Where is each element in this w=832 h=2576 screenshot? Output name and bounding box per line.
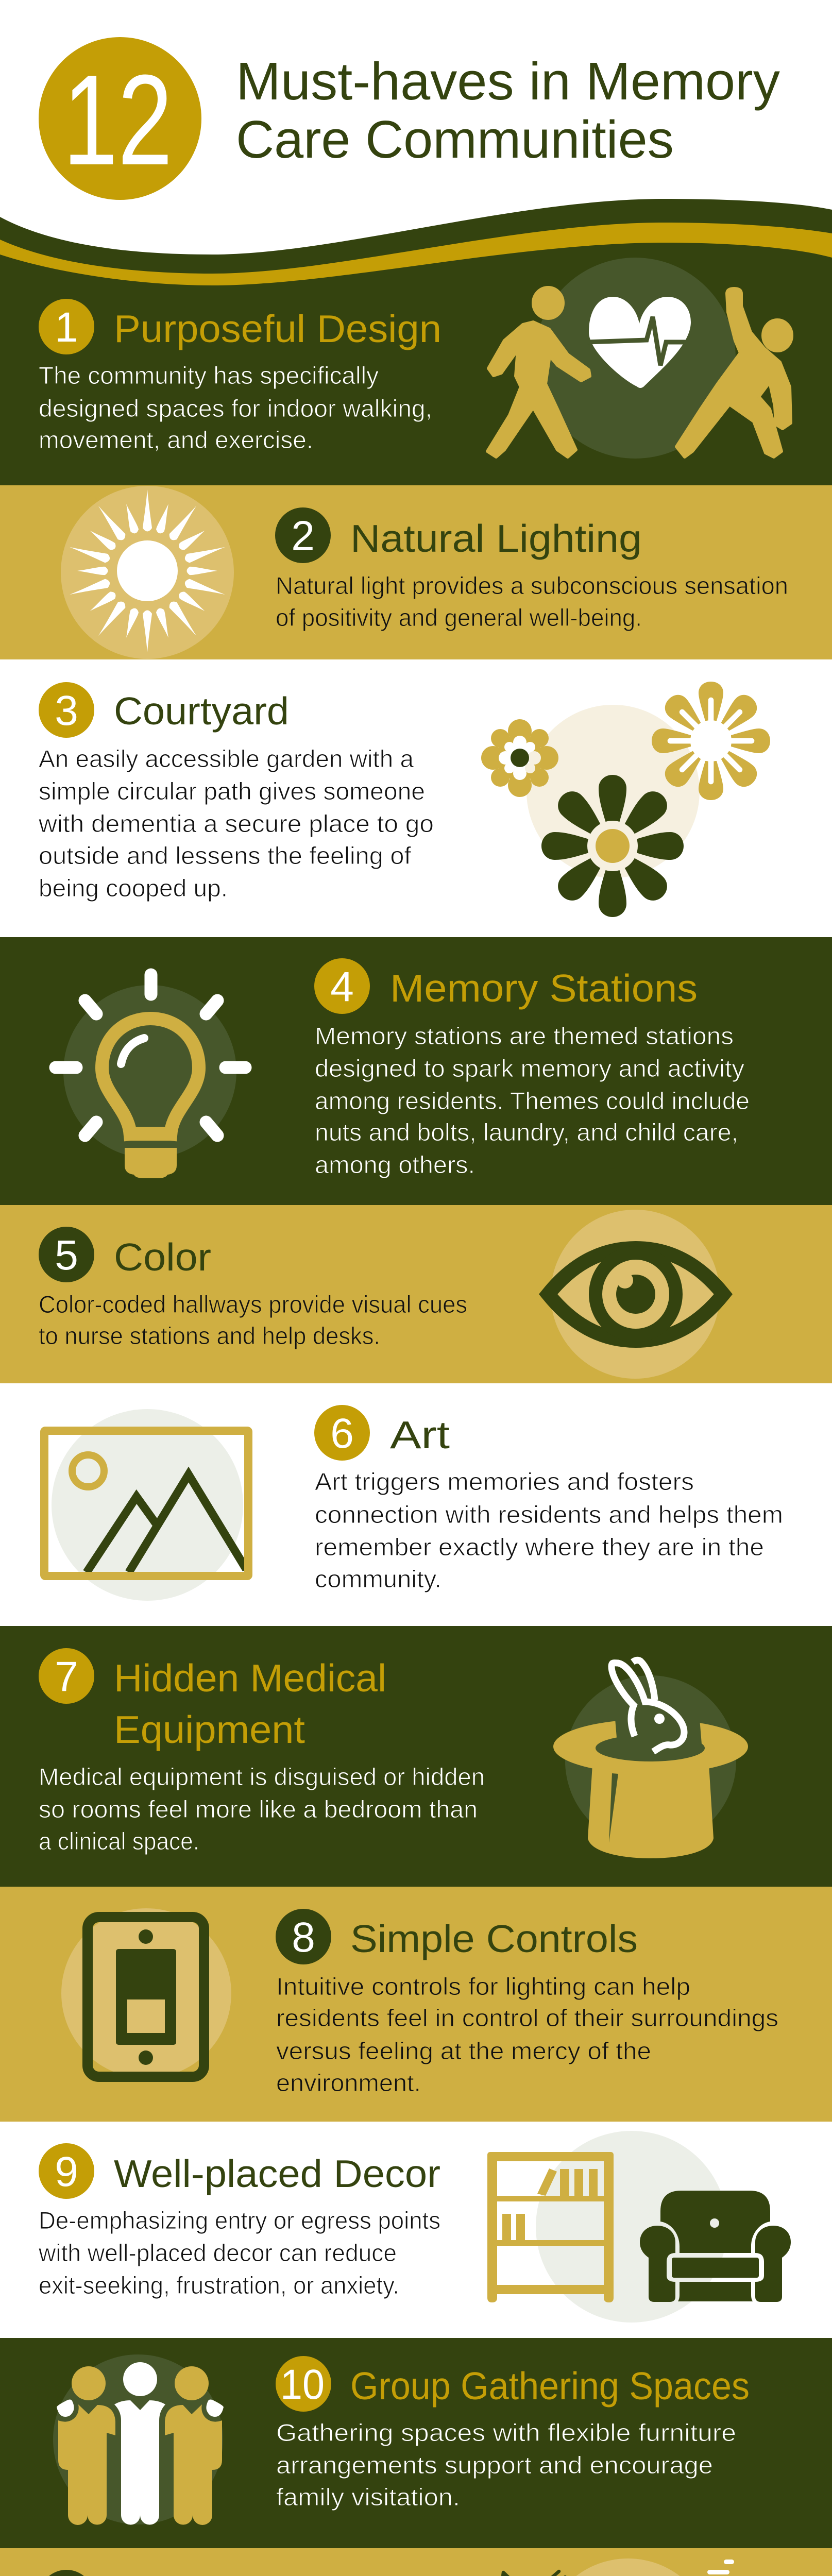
panel: 5 Color: [0, 1205, 832, 1383]
picture frame: [44, 1431, 248, 1576]
number badge 5: 5: [55, 1232, 78, 1279]
panel: 7 Hidden Medical Equipment: [0, 1626, 832, 1887]
heading: Purposeful Design: [114, 307, 442, 350]
body text: Art triggers memories and fosters: [315, 1468, 694, 1495]
body text: arrangements support and encourage: [276, 2451, 713, 2479]
body text: [276, 1973, 778, 2096]
icon: framed mountain picture: [44, 1409, 248, 1601]
number badge 7: [39, 1648, 94, 1704]
body text: community.: [315, 1565, 442, 1592]
body text: [38, 2207, 440, 2299]
heading: Hidden Medical: [114, 1656, 386, 1700]
panel: 8 Simple Controls: [0, 1887, 832, 2122]
body text: exit-seeking, frustration, or anxiety.: [39, 2272, 399, 2299]
number badge 2: 2: [291, 513, 315, 560]
panel background: [0, 1626, 832, 1887]
icon: food and drink: [503, 2558, 762, 2576]
body text: The community has specifically: [39, 362, 379, 389]
body text: so rooms feel more like a bedroom than: [39, 1795, 478, 1823]
plate screws: [139, 1929, 153, 2065]
title: Must-haves in Memory: [236, 52, 780, 111]
hands on shoulders: [57, 2400, 224, 2417]
body text: remember exactly where they are in the: [315, 1533, 764, 1561]
number badge 1: [39, 299, 94, 354]
body text: [315, 1468, 783, 1592]
body text: [315, 1022, 750, 1178]
icon: heart with pulse line: [587, 297, 693, 388]
panel: 6 Art: [0, 1383, 832, 1626]
title: Care Communities: [236, 110, 674, 169]
icon: sun: [61, 486, 234, 659]
body text: being cooped up.: [39, 874, 228, 902]
switch toggle: [127, 1999, 165, 2033]
body text: environment.: [276, 2069, 421, 2096]
heading: Memory Stations: [390, 967, 698, 1010]
number badge 5: [39, 1227, 94, 1282]
number badge 9: 9: [55, 2148, 78, 2195]
picture sun: [72, 1455, 104, 1487]
number badge 3: 3: [55, 687, 78, 734]
rabbit: [612, 1660, 702, 1752]
icon: knife and fork: [503, 2571, 577, 2576]
icon: light bulb: [56, 975, 245, 1178]
panel: 3 Courtyard: [0, 659, 832, 937]
body text: Gathering spaces with flexible furniture: [276, 2419, 736, 2446]
body text: to nurse stations and help desks.: [39, 1322, 380, 1349]
icon: bookcase and armchair: [487, 2131, 791, 2323]
picture mountains: [87, 1475, 246, 1572]
panel: 11 Dining Room: [0, 2548, 832, 2576]
icon: gold flower with slits: [652, 682, 770, 800]
body text: De-emphasizing entry or egress points: [39, 2207, 440, 2234]
number badge 8: 8: [292, 1914, 315, 1961]
body text: simple circular path gives someone: [39, 777, 425, 805]
icon: steam: [707, 2560, 734, 2576]
panel background: [0, 2122, 832, 2338]
panel: 9 Well-placed Decor: [0, 2122, 832, 2338]
body text: a clinical space.: [39, 1827, 199, 1855]
body text: Medical equipment is disguised or hidden: [39, 1763, 485, 1790]
heading: Group Gathering Spaces: [350, 2364, 750, 2408]
armchair: [640, 2191, 791, 2302]
body text: family visitation.: [276, 2483, 460, 2511]
switch body: [116, 1949, 176, 2045]
panel: 10 Group Gathering Spaces: [0, 2338, 832, 2548]
body text: [39, 1291, 467, 1349]
books: [502, 2168, 598, 2240]
heading: Equipment: [114, 1708, 305, 1751]
icon: group of people: [53, 2354, 224, 2525]
heading: Courtyard: [114, 689, 289, 733]
body text: with dementia a secure place to go: [38, 810, 434, 837]
panel background: [0, 2548, 832, 2576]
hat brim: [553, 1719, 748, 1774]
body text: [39, 362, 432, 453]
left person: [58, 2366, 115, 2525]
heading: Art: [390, 1413, 450, 1456]
hat crown: [588, 1765, 714, 1858]
icon: light switch: [61, 1908, 231, 2078]
bulb highlight and rays: [56, 975, 245, 1136]
heading: Color: [114, 1235, 211, 1279]
icon: flowers: [481, 682, 770, 917]
bookcase: [487, 2152, 614, 2302]
center person: [114, 2362, 165, 2525]
body text: Memory stations are themed stations: [315, 1022, 734, 1049]
panel: 2 Natural Lighting: [0, 485, 832, 659]
number badge 7: 7: [55, 1653, 78, 1700]
panel background: [0, 1205, 832, 1383]
number badge 8: [276, 1909, 331, 1964]
panel: 4 Memory Stations: [0, 937, 832, 1205]
gold wave band: [0, 223, 832, 285]
number badge 4: 4: [330, 963, 354, 1010]
body text: designed spaces for indoor walking,: [39, 395, 432, 422]
number badge 6: [314, 1405, 370, 1461]
panel background: [0, 485, 832, 659]
body text: designed to spark memory and activity: [315, 1055, 745, 1082]
body text: Color-coded hallways provide visual cues: [39, 1291, 467, 1318]
number badge 3: [39, 682, 94, 738]
heading: [114, 1656, 386, 1751]
panel background: [0, 1887, 832, 2122]
icon: walking person: [487, 287, 590, 457]
top wave panel background: [0, 199, 832, 486]
number badge 2: [275, 507, 331, 563]
body text: Natural light provides a subconscious sensation: [276, 572, 788, 599]
body text: [39, 1763, 485, 1855]
bulb glass outline: [102, 1019, 199, 1141]
body text: [38, 745, 434, 902]
heading: Well-placed Decor: [114, 2152, 440, 2195]
icon: stretching person: [676, 289, 792, 457]
badge: big number 12: 12: [63, 48, 173, 192]
body text: among residents. Themes could include: [315, 1087, 750, 1114]
body text: outside and lessens the feeling of: [39, 842, 412, 869]
heading: Simple Controls: [350, 1917, 638, 1960]
number badge 1: 1: [55, 304, 78, 351]
body text: [276, 2419, 736, 2511]
icon: small gold flower: [481, 719, 558, 797]
hat opening: [596, 1735, 705, 1761]
body text: nuts and bolts, laundry, and child care,: [315, 1118, 738, 1146]
bulb neck: [125, 1127, 177, 1141]
icon: walker, heart and exerciser: [487, 258, 792, 459]
number badge 9: [39, 2143, 94, 2199]
number badge 6: 6: [330, 1410, 354, 1457]
number badge 4: [314, 958, 370, 1014]
body text: An easily accessible garden with a: [39, 745, 414, 772]
number badge 11: [39, 2570, 94, 2576]
body text: of positivity and general well-being.: [276, 604, 642, 631]
body text: Intuitive controls for lighting can help: [276, 1973, 690, 2000]
header: [39, 37, 780, 200]
title: [236, 52, 780, 169]
panel: 1 Purposeful Design: [0, 199, 832, 486]
body text: movement, and exercise.: [39, 426, 313, 453]
right person: [165, 2366, 222, 2525]
heading: Natural Lighting: [350, 517, 642, 560]
body text: with well-placed decor can reduce: [38, 2239, 397, 2266]
panel background: [0, 659, 832, 937]
bulb base: [125, 1148, 177, 1178]
panel background: [0, 1383, 832, 1626]
switch plate: [88, 1917, 204, 2077]
body text: [276, 572, 788, 631]
icon: dark flower: [541, 775, 684, 917]
body text: among others.: [315, 1151, 475, 1178]
icon: eye: [548, 1210, 723, 1379]
hat fold: [609, 1773, 618, 1843]
body text: residents feel in control of their surroundings: [276, 2004, 778, 2031]
number badge 10: 10: [280, 2361, 325, 2408]
panel background: [0, 937, 832, 1205]
body text: connection with residents and helps them: [315, 1501, 783, 1528]
icon: rabbit in top hat: [553, 1660, 748, 1858]
body text: versus feeling at the mercy of the: [276, 2037, 651, 2064]
panel background: [0, 2338, 832, 2548]
